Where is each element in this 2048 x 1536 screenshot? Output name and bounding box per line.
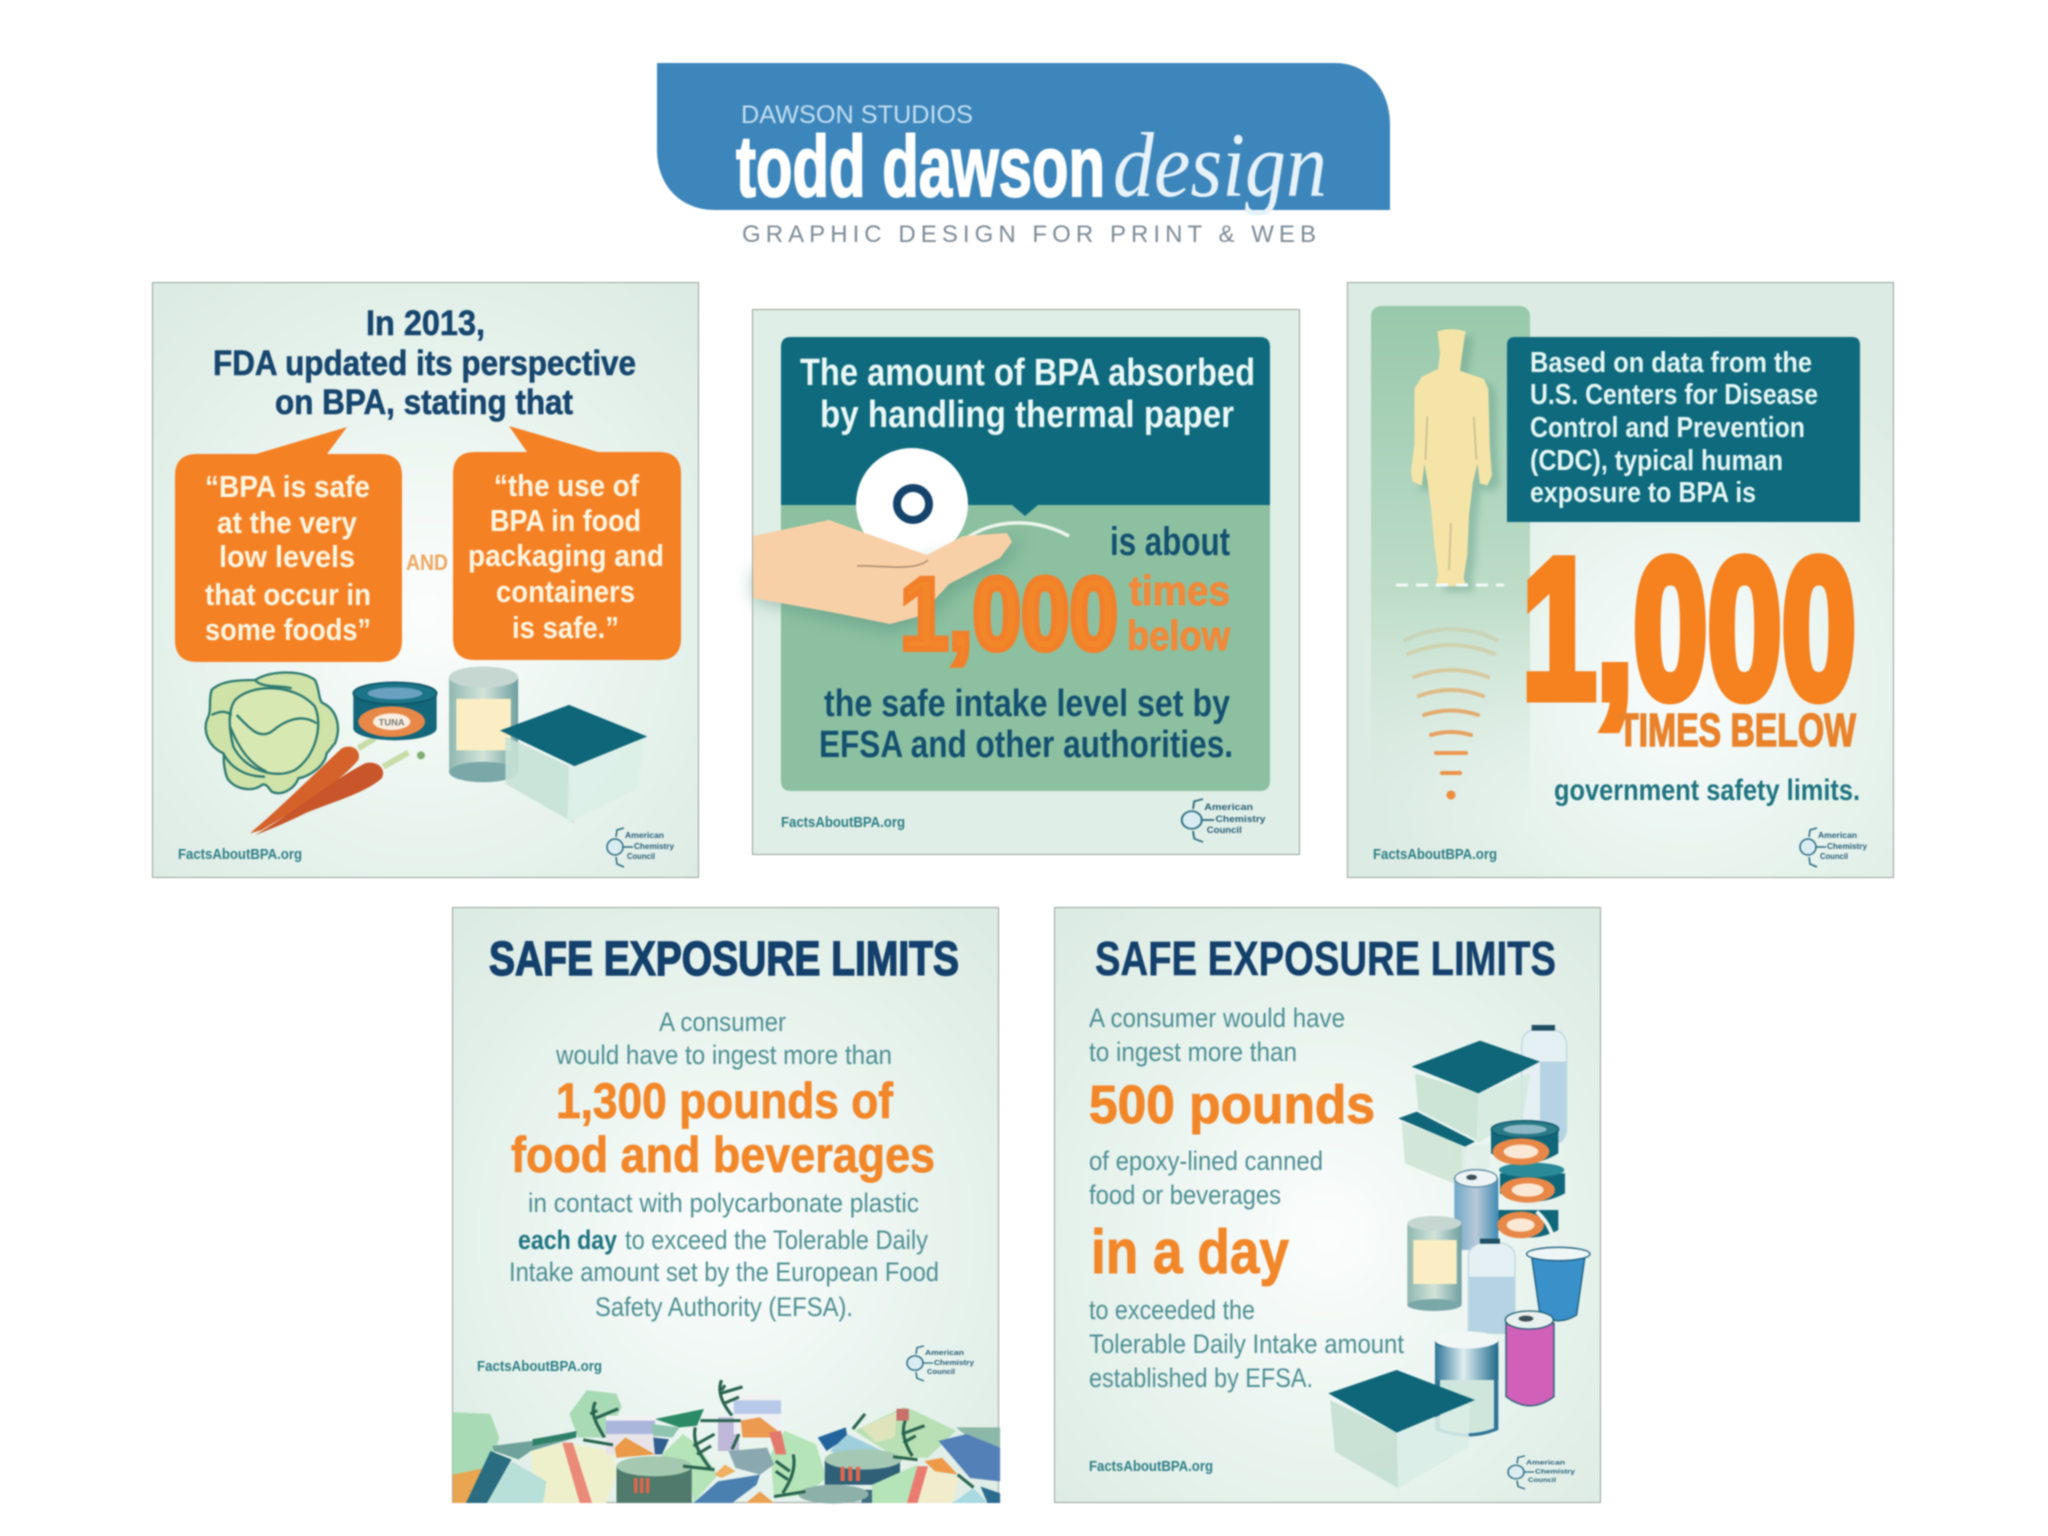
logo: American Chemistry Council: American [625,831,664,840]
icon: stacked containers [1398,1041,1540,1187]
body text: in contact with polycarbonate plastic [528,1188,919,1218]
body text [509,1188,939,1322]
text: safe intake level: EFSA and other authorities. [819,724,1233,766]
heading: FDA [213,304,636,422]
logo: American Chemistry Council: Council [927,1367,955,1376]
intro text: would have to ingest more than [555,1040,892,1070]
big number: 1,000: 1,000 [1522,518,1856,739]
logo: American Chemistry Council: Chemistry [1535,1467,1576,1476]
logo: todd dawson design [657,63,1390,248]
panel: CDC human exposure [1348,282,1894,878]
icon: stacked tuna cans [1491,1121,1565,1250]
speech bubble: use of BPA: containers [496,574,635,609]
icon: blue can [1454,1170,1498,1250]
logo: American Chemistry Council: American [1526,1458,1566,1466]
highlight: in a day: in a day [1091,1218,1289,1287]
speech bubble: use of BPA: is safe.” [512,610,619,645]
footer url: FactsAboutBPA.org [1373,846,1497,863]
body text: exceed: to exceeded the [1089,1295,1255,1325]
heading: FDA: FDA updated its perspective [213,344,636,383]
body text: Intake amount set by the European Food [509,1257,939,1287]
highlight: 1,300 pounds: 1,300 pounds of [556,1073,893,1129]
highlight: 500 pounds: 500 pounds [1089,1075,1375,1135]
text: times below: below [1127,612,1230,659]
heading: amount of BPA [800,352,1255,436]
dashed ground line [1396,584,1504,586]
logo: American Chemistry Council: Council [1528,1476,1556,1484]
text: times below [1127,567,1230,659]
logo: design: design [1113,114,1327,216]
logo: American Chemistry Council [1182,799,1266,842]
body text: Safety Authority (EFSA). [595,1292,853,1322]
green column [1371,306,1530,826]
callout: CDC data [1507,337,1860,522]
logo: American Chemistry Council: Chemistry [934,1358,975,1367]
logo: American Chemistry Council: American [1818,831,1857,840]
speech bubble: BPA is safe: that occur in [205,577,371,612]
footer url: FactsAboutBPA.org [781,814,905,831]
logo: American Chemistry Council: Chemistry [1827,842,1868,851]
logo banner [657,63,1390,210]
logo: American Chemistry Council [1508,1456,1576,1489]
intro text [555,1007,892,1070]
logo: American Chemistry Council: Chemistry [634,842,675,851]
logo: American Chemistry Council: American [925,1348,964,1357]
illustration: upper containers and cans [1398,1025,1567,1250]
icon: metal can [1435,1331,1498,1437]
footer url: FactsAboutBPA.org [477,1358,602,1375]
icon: food can [449,666,518,782]
panel: thermal paper [752,310,1300,854]
body text: exceed: established by EFSA. [1089,1363,1313,1393]
speech bubble: BPA is safe: some foods” [205,612,371,647]
icon: tuna can: TUNA [379,717,405,727]
text: times below: times [1129,567,1230,614]
logo: tagline: GRAPHIC DESIGN FOR PRINT & WEB [742,221,1316,248]
icon: plastic container [500,705,647,823]
text: safe intake level [819,683,1233,766]
speech bubble: use of BPA: “the use of [494,468,640,503]
logo: American Chemistry Council [907,1346,975,1381]
heading: FDA: on BPA, stating that [275,383,573,422]
callout: CDC data: exposure to BPA is [1530,477,1756,509]
icon: bottle top [1522,1025,1567,1143]
heading: FDA: In 2013, [366,304,485,343]
teal header block [781,337,1270,516]
icon: pink can [1505,1311,1554,1406]
speech bubble: BPA is safe: low levels [219,539,355,574]
highlight: 1,300 pounds: food and beverages [511,1127,935,1183]
text: is about: is about [1110,520,1230,564]
body text: canned food: of epoxy-lined canned [1089,1146,1323,1176]
speech bubble: use of BPA [453,426,681,660]
big number: 1,000: 1,000 [900,557,1118,671]
logo: American Chemistry Council: American [1204,802,1253,812]
logo: dawson studios: DAWSON STUDIOS [741,101,973,129]
illustration: lower containers, cup and cans [1328,1216,1590,1488]
callout: CDC data: U.S. Centers for Disease [1530,379,1818,411]
body text: each day [518,1225,617,1255]
logo: American Chemistry Council [1800,828,1868,867]
footer url: FactsAboutBPA.org [1089,1458,1213,1475]
logo: American Chemistry Council: Council [1207,825,1242,835]
icon: bottle middle [1468,1239,1515,1333]
logo: todd dawson: todd dawson [736,119,1105,215]
body text: canned food [1089,1146,1323,1210]
panel: 1,300 pounds [452,908,1000,1504]
body text: exceed [1089,1295,1404,1393]
panel: 500 pounds [1054,908,1600,1502]
intro text [1089,1003,1345,1067]
icon: exposure waves [1405,629,1497,798]
text: times below: TIMES BELOW [1618,704,1856,756]
body text: canned food: food or beverages [1089,1180,1281,1210]
icon: plastic container [1328,1370,1475,1488]
icon: human figure [1411,329,1500,592]
speech bubble: BPA is safe: “BPA is safe [205,469,370,504]
heading: safe exposure limits: SAFE EXPOSURE LIMITS [489,933,959,986]
body text: exceed: Tolerable Daily Intake amount [1089,1329,1404,1359]
highlight: 1,300 pounds [511,1073,935,1183]
icon: food can [1407,1216,1462,1311]
footer url: FactsAboutBPA.org [178,846,302,863]
intro text: A consumer [659,1007,786,1037]
speech bubble: BPA is safe: at the very [217,505,358,540]
panel: FDA perspective [152,282,698,878]
icon: carrots [250,738,425,835]
text: government safety limits: government safety limits. [1554,774,1860,807]
heading: amount of BPA: by handling thermal paper [820,394,1234,436]
logo: American Chemistry Council [607,828,675,867]
icon: pouring cup [1527,1247,1590,1321]
callout: CDC data: Control and Prevention [1530,412,1805,444]
label: AND: AND [406,550,448,575]
icon: tuna can [353,682,437,740]
illustration: can and container [449,666,647,823]
icon: hand [753,520,1025,632]
illustration: cabbage, tuna and carrots [206,672,437,835]
heading: safe exposure limits: SAFE EXPOSURE LIMITS [1095,933,1556,986]
speech bubble: use of BPA: packaging and [468,538,664,573]
illustration: pile of food and beverages [453,1380,1000,1504]
heading: amount of BPA: The amount of BPA absorbed [800,352,1255,394]
speech bubble: BPA is safe [175,427,402,662]
paper strip [958,523,1069,545]
speech bubble: use of BPA: BPA in food [490,503,641,538]
icon: thermal paper roll [856,448,968,560]
text: safe intake level: the safe intake level set by [824,683,1230,725]
intro text: A consumer would have [1089,1003,1345,1033]
callout: CDC data: (CDC), typical human [1530,445,1783,477]
icon: cabbage [206,672,338,793]
logo: American Chemistry Council: Chemistry [1216,814,1266,824]
callout: CDC data: Based on data from the [1530,347,1812,379]
intro text: to ingest more than [1089,1037,1297,1067]
logo: American Chemistry Council: Council [1820,852,1848,861]
body text: to exceed the Tolerable Daily [625,1225,928,1255]
logo: American Chemistry Council: Council [627,852,655,861]
green lower block [781,505,1270,791]
